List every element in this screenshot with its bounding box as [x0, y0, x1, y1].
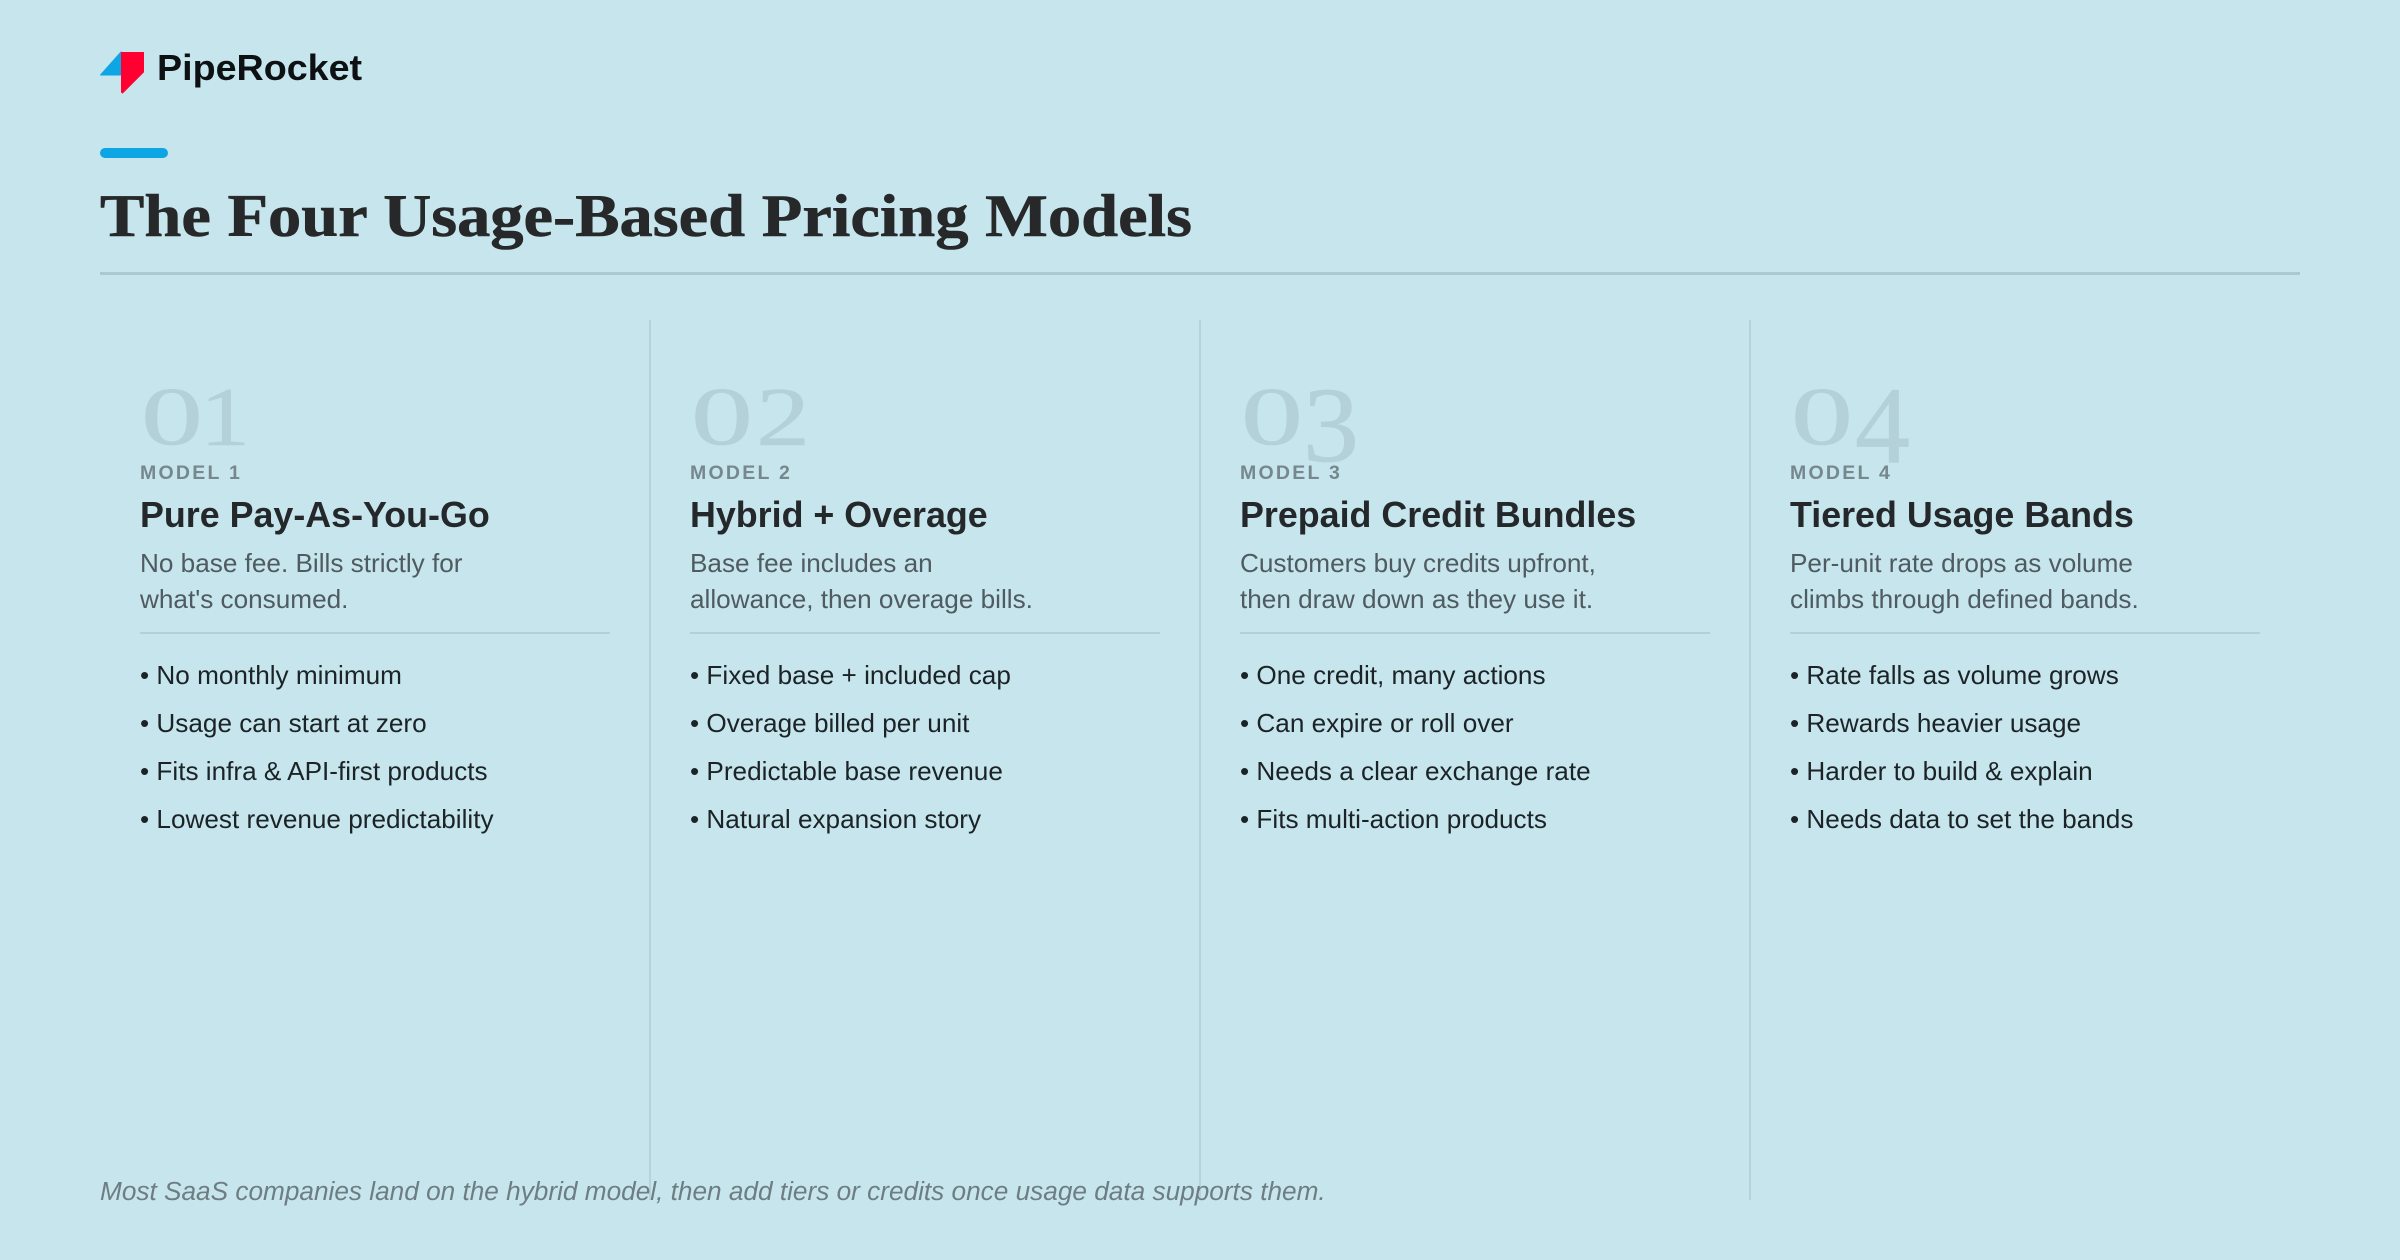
- title rule: [100, 272, 2300, 275]
- model label: MODEL 3: [1240, 462, 1342, 484]
- divider: [140, 632, 610, 634]
- bullet list: • Rate falls as volume grows: [1790, 660, 2119, 690]
- model label: MODEL 4: [1790, 462, 1892, 484]
- panel: model 3: [1240, 365, 1710, 834]
- model description: Base fee includes an: [690, 548, 933, 578]
- bullet list: • Usage can start at zero: [140, 708, 427, 738]
- panel: model 4: [1790, 364, 2260, 834]
- column separator 2: [1199, 320, 1201, 1200]
- bullet list: [140, 660, 494, 834]
- divider: [1790, 632, 2260, 634]
- divider: [1240, 632, 1710, 634]
- model description: Per-unit rate drops as volume: [1790, 548, 2133, 578]
- model description: climbs through defined bands.: [1790, 584, 2139, 614]
- bullet list: • Harder to build & explain: [1790, 756, 2093, 786]
- bullet list: • Rewards heavier usage: [1790, 708, 2081, 738]
- bullet list: • Needs data to set the bands: [1790, 804, 2133, 834]
- model description: [690, 548, 1033, 614]
- number 01: 0: [141, 370, 203, 462]
- bullet list: • Fixed base + included cap: [690, 660, 1011, 690]
- bullet list: • Fits infra & API-first products: [140, 756, 488, 786]
- title: The Four Usage-Based Pricing Models: [100, 183, 1192, 249]
- model heading: Tiered Usage Bands: [1790, 495, 2134, 535]
- model description: Customers buy credits upfront,: [1240, 548, 1596, 578]
- bullet list: [690, 660, 1011, 834]
- bullet list: • Can expire or roll over: [1240, 708, 1514, 738]
- model description: [1790, 548, 2139, 614]
- model description: [1240, 548, 1596, 614]
- bullet list: [1240, 660, 1591, 834]
- model heading: Pure Pay-As-You-Go: [140, 495, 490, 535]
- bullet list: [1790, 660, 2133, 834]
- bullet list: • Overage billed per unit: [690, 708, 969, 738]
- bullet list: • Fits multi-action products: [1240, 804, 1547, 834]
- number 02: 2: [756, 370, 810, 463]
- model description: then draw down as they use it.: [1240, 584, 1593, 614]
- model heading: Hybrid + Overage: [690, 495, 988, 535]
- icon: logo mark: [100, 52, 144, 94]
- bullet list: • Needs a clear exchange rate: [1240, 756, 1591, 786]
- bullet list: • Natural expansion story: [690, 804, 981, 834]
- column separator 3: [1749, 320, 1751, 1200]
- model label: MODEL 1: [140, 462, 242, 484]
- model label: MODEL 2: [690, 462, 792, 484]
- footnote: Most SaaS companies land on the hybrid model, then add tiers or credits once usage data supports them.: [100, 1176, 1326, 1206]
- panel: model 2: [690, 370, 1160, 834]
- model description: what's consumed.: [140, 584, 348, 614]
- bullet list: • Lowest revenue predictability: [140, 804, 494, 834]
- model description: [140, 548, 463, 614]
- column separator 1: [649, 320, 651, 1200]
- number 03: 0: [1241, 370, 1303, 462]
- bullet list: • No monthly minimum: [140, 660, 402, 690]
- divider: [690, 632, 1160, 634]
- number 03: 3: [1303, 365, 1359, 484]
- model description: allowance, then overage bills.: [690, 584, 1033, 614]
- number 04: 4: [1855, 364, 1910, 486]
- number 02: 0: [691, 370, 753, 462]
- model heading: Prepaid Credit Bundles: [1240, 495, 1636, 535]
- logo: [100, 47, 362, 94]
- panel: model 1: [140, 370, 610, 834]
- bullet list: • One credit, many actions: [1240, 660, 1546, 690]
- number 01: 1: [200, 370, 250, 463]
- accent bar: [100, 148, 168, 158]
- number 04: 0: [1791, 370, 1853, 462]
- bullet list: • Predictable base revenue: [690, 756, 1003, 786]
- model description: No base fee. Bills strictly for: [140, 548, 463, 578]
- logo wordmark: PipeRocket: [157, 47, 362, 88]
